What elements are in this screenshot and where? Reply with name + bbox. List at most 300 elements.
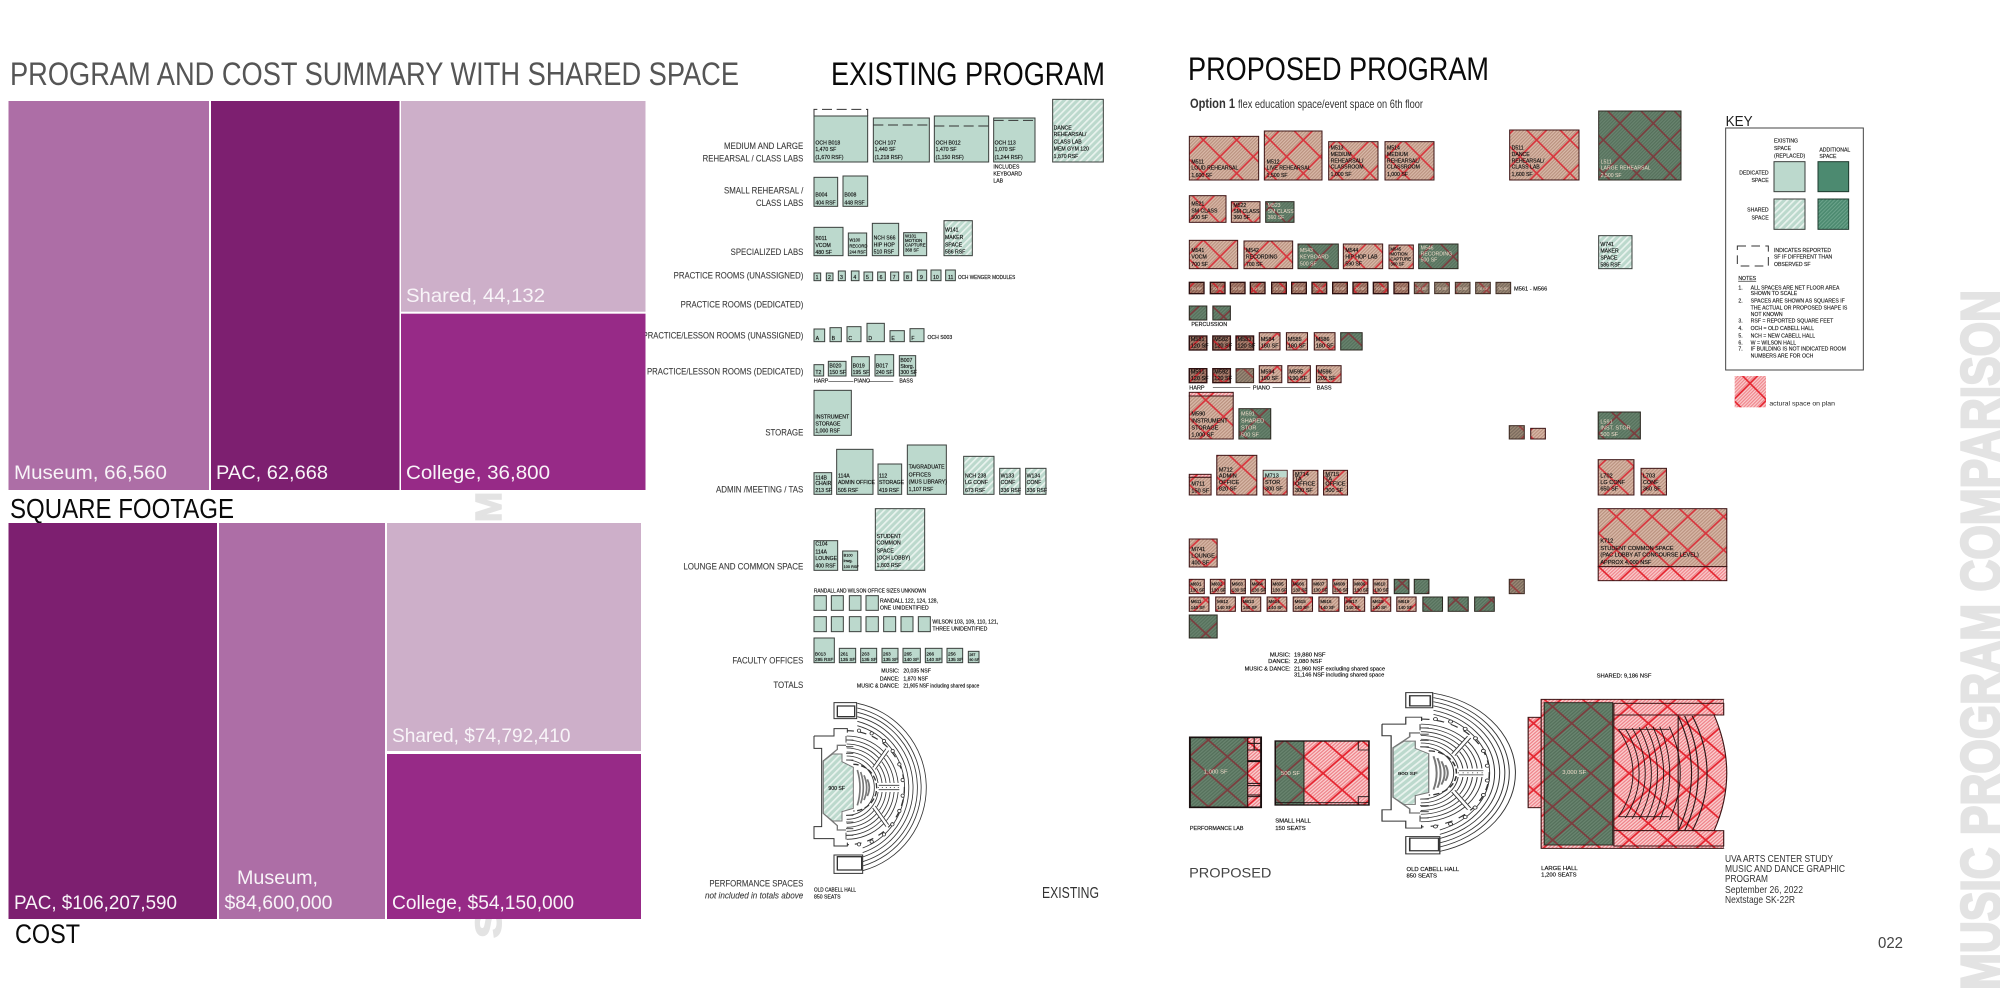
lesson rooms proposed row 2: 190 SF [1289,376,1308,382]
lesson rooms proposed row 1 [1189,333,1362,350]
proposed totals: MUSIC: [1270,653,1291,659]
faculty offices: 140 SF [926,657,941,662]
faculty offices proposed row 2: 140 SF [1346,605,1361,610]
faculty offices proposed row 1: M602 [1211,581,1223,586]
small class rooms proposed: M523 [1268,203,1281,209]
row labels lower: FACULTY OFFICES [732,655,803,665]
faculty offices proposed row 2: 140 SF [1398,605,1413,610]
medium and large rehearsal rooms: 1,070 SF [995,147,1016,153]
storage proposed: STOR [1241,425,1256,431]
key notes: NCH = NEW CABELL HALL [1751,333,1815,339]
specialized labs proposed: 586 RSF [1600,262,1621,268]
panel: treemap cost [8,523,641,919]
practice modules M561 to M566: 70 SF [1478,286,1489,291]
lesson rooms proposed row 2: 120 SF [1191,376,1209,382]
specialized labs proposed: MAKER [1600,248,1619,254]
rehearsal rooms proposed: LARGE REHEARSAL [1601,166,1651,172]
admin rooms: 505 RSF [838,488,858,494]
proposed totals: 2,080 NSF [1294,659,1323,665]
faculty offices proposed row 2: 140 SF [1320,605,1335,610]
admin proposed: L703 [1643,474,1655,480]
existing theater: Old Cabell Hall [705,703,926,901]
unknown size offices: RANDALL AND WILSON OFFICE SIZES UNKNOWN [814,588,926,594]
treemap labels sf: PAC, 62,668 [216,462,328,484]
row labels lower: ADMIN /MEETING / TAS [716,485,803,495]
student common space: STUDENT COMMON SPACE [1600,546,1674,552]
faculty offices proposed row 2: M613 [1243,599,1255,604]
faculty offices proposed row 1: M603 [1232,581,1244,586]
specialized labs proposed: 360 SF [1390,262,1405,267]
key notes: NUMBERS ARE FOR OCH [1751,354,1814,360]
specialized labs proposed: W741 [1600,242,1614,248]
small class rooms proposed: 360 SF [1233,215,1250,221]
faculty offices: 263 [862,651,869,656]
faculty offices: 263 [883,651,891,656]
student common space: K712 [1600,538,1613,544]
medium and large rehearsal rooms: (1,244 RSF) [995,155,1023,161]
lesson rooms dedicated: PIANO [854,379,870,385]
lesson rooms proposed row 2: 202 SF [1318,376,1336,382]
lesson rooms proposed row 1: M585 [1288,337,1302,343]
rehearsal rooms proposed: 1,600 SF [1191,173,1212,179]
row labels lower: LOUNGE AND COMMON SPACE [683,562,803,572]
existing rooms lower block [647,355,1047,690]
specialized labs proposed: 700 SF [1191,262,1208,268]
key column head additional: ADDITIONAL [1819,147,1850,153]
rehearsal rooms proposed: REHEARSAL/ [1512,158,1545,164]
medium and large rehearsal rooms: LAB [993,179,1004,185]
lesson rooms dedicated: B007 [900,358,912,364]
admin rooms: 419 RSF [879,488,899,494]
admin rooms: 673 RSF [965,488,985,494]
practice modules M561 to M566: 70 SF [1375,286,1387,291]
practice modules M561 to M566: 70 SF [1355,286,1366,291]
student common space: APPROX 4,000 NSF [1600,560,1652,566]
admin proposed: OFFICE [1295,481,1316,487]
admin proposed: LG CONF [1600,480,1626,486]
small hall: 150 SEATS [1275,826,1306,832]
performance spaces label [705,878,803,901]
practice modules M561 to M566 [1189,282,1547,294]
storage proposed: SHARED [1241,418,1264,424]
small rehearsal rooms: 404 RSF [815,200,836,206]
performance spaces label: PERFORMANCE SPACES [709,878,803,888]
key notes: 4. [1738,326,1743,332]
lesson rooms proposed row 2: HARP [1189,385,1205,391]
practice modules M561 to M566: 70 SF [1314,286,1325,291]
lounge and common rooms: LOUNGE [815,556,838,562]
faculty offices proposed row 2: M615 [1295,599,1306,604]
faculty offices proposed row 2 [1189,597,1494,638]
rehearsal rooms proposed: M512 [1267,159,1280,165]
medium and large rehearsal rooms: (1,150 RSF) [936,155,964,161]
storage proposed: M591 [1241,412,1255,418]
storage proposed: L591 [1600,419,1613,425]
specialized labs proposed: M544 [1345,248,1358,254]
faculty offices: 135 SF [948,657,963,662]
lesson rooms dedicated: HARP [814,379,829,385]
key row heads: SHARED [1747,207,1769,213]
faculty offices [814,638,980,663]
small rehearsal rooms: 448 RSF [844,200,865,206]
faculty offices proposed row 1: M606 [1293,581,1305,586]
label proposed: PROPOSED [1189,866,1271,881]
practice rooms unassigned: 9 [920,275,923,281]
admin proposed: OFFICE [1219,480,1240,486]
faculty offices proposed row 2: 140 SF [1269,605,1283,610]
practice rooms unassigned: 3 [840,275,843,281]
proposed theater caption: OLD CABELL HALL [1406,867,1459,873]
practice rooms unassigned: 11 [948,275,953,281]
key notes: 6. [1738,340,1743,346]
rehearsal rooms proposed: MEDIUM [1331,152,1352,158]
admin proposed [1189,455,1666,495]
key row heads [1739,171,1769,221]
rehearsal rooms proposed: L511 [1601,159,1612,165]
unknown size offices: WILSON 103, 109, 110, 121, [932,620,998,626]
rehearsal rooms proposed: 1,000 SF [1331,172,1352,178]
storage proposed: 1,000 SF [1191,432,1215,438]
slice: shared sf [401,101,646,312]
lounge and common rooms: SPACE [877,548,894,554]
faculty offices proposed row 1: 130 SF [1354,587,1369,592]
admin proposed: 300 SF [1325,488,1344,494]
theater caption: OLD CABELL HALL [814,888,856,894]
faculty offices proposed row 2: 140 SF [1191,605,1205,610]
lesson rooms proposed row 2: 120 SF [1214,376,1233,382]
faculty offices: 135 SF [862,657,877,662]
proposed totals: DANCE: [1268,659,1291,665]
small class rooms proposed: SM CLASS [1233,209,1260,215]
unknown size offices [814,588,998,632]
storage room: INSTRUMENT [815,414,849,420]
admin rooms: CHAIR [815,481,832,487]
practice modules M561 to M566: 70 SF [1396,286,1407,291]
student common space [1598,509,1727,581]
practice rooms unassigned: 6 [880,275,883,281]
proposed theater caption: 850 SEATS [1406,874,1437,879]
small class rooms proposed: SM CLASS [1191,208,1218,214]
specialized labs: MAKER [945,235,964,241]
percussion rooms [1189,306,1230,328]
practice modules M561 to M566: 70 SF [1232,286,1244,291]
admin proposed: 150 SF [1191,488,1210,494]
proposed performance spaces [1189,653,1736,881]
small rehearsal rooms [814,176,868,206]
rehearsal rooms proposed [1189,111,1681,180]
faculty offices proposed row 2: 140 SF [1372,605,1387,610]
lesson rooms unassigned: E [891,336,895,342]
specialized labs: MOTION [905,238,922,243]
row labels upper: PRACTICE ROOMS (DEDICATED) [681,300,803,310]
admin proposed: M711 [1191,482,1205,488]
specialized labs: RECORD [849,243,867,248]
panel: key [1726,114,1863,407]
admin rooms: OFFICES [909,472,932,478]
practice rooms unassigned: 7 [893,275,896,281]
row labels lower: PRACTICE/LESSON ROOMS (DEDICATED) [647,366,803,376]
specialized labs proposed: KEYBOARD [1300,255,1329,261]
lesson rooms proposed row 1: M583 [1237,337,1251,343]
specialized labs: CAPTURE [905,243,926,248]
admin rooms: LG CONF [965,480,988,486]
performance spaces label: not included in totals above [705,891,803,901]
specialized labs proposed: RECORDING [1246,255,1278,261]
lesson rooms dedicated: T2 [815,370,821,376]
medium and large rehearsal rooms: OCH B012 [936,140,961,146]
admin proposed: M714 [1295,472,1309,478]
faculty offices proposed row 2: M616 [1320,599,1332,604]
lounge proposed: M741 [1191,547,1205,553]
specialized labs proposed: CAPTURE [1390,257,1411,262]
key heading: KEY [1726,114,1753,130]
admin proposed: ADMIN [1219,474,1237,480]
medium and large rehearsal rooms: 1,470 SF [815,147,836,153]
option subtitle [1190,95,1423,111]
admin rooms: W133 [1001,473,1014,479]
row labels upper: PRACTICE ROOMS (UNASSIGNED) [674,270,803,280]
faculty offices proposed row 2: 140 SF [1295,605,1309,610]
faculty offices proposed row 2: 140 SF [1217,605,1232,610]
rehearsal rooms proposed: M514 [1387,146,1400,152]
admin proposed: STOR [1265,480,1280,486]
faculty offices: 266 [926,651,934,656]
admin proposed: M712 [1219,467,1233,473]
lesson rooms unassigned: C [848,336,852,342]
practice rooms unassigned: 5 [866,275,869,281]
lesson rooms unassigned: A [816,336,820,342]
admin proposed: TA [1295,477,1302,483]
option subtitle: flex education space/event space on 6th floor [1238,97,1423,111]
lesson rooms unassigned [814,323,952,342]
key red swatch [1735,376,1835,407]
medium and large rehearsal rooms: CLASS LAB [1054,139,1082,145]
lounge and common rooms: 114A [815,549,828,555]
theater caption [814,888,856,900]
specialized labs proposed: M542 [1246,248,1259,254]
lesson rooms dedicated: BASS [899,379,914,385]
lesson rooms proposed row 1: 180 SF [1261,343,1279,349]
rehearsal rooms proposed: CLASSROOM [1387,165,1420,171]
treemap labels cost: PAC, $106,207,590 [14,892,177,914]
specialized labs: 244 RSF [849,249,866,254]
faculty offices: 135 SF [840,657,855,662]
admin rooms: CONF [1001,480,1015,486]
specialized labs proposed: HIP HOP LAB [1345,255,1378,261]
admin rooms: 112 [879,473,887,479]
faculty offices proposed row 1: M605 [1272,581,1284,586]
watermark fragments behind treemaps: M [468,492,509,522]
specialized labs proposed: 700 SF [1246,262,1263,268]
performance lab: PERFORMANCE LAB [1190,826,1244,832]
storage proposed: 500 SF [1241,432,1260,438]
key notes: RSF = REPORTED SQUARE FEET [1751,319,1834,325]
practice modules M561 to M566: M561 - M566 [1514,287,1547,293]
specialized labs: W100 [849,237,860,242]
faculty offices proposed row 1: 130 SF [1293,587,1308,592]
row labels upper: CLASS LABS [756,198,803,208]
lounge and common rooms: 1,803 RSF [877,563,901,569]
lesson rooms proposed row 1: M582 [1214,337,1228,343]
key row heads: DEDICATED [1739,171,1769,177]
faculty offices proposed row 1: 130 SF [1334,587,1349,592]
lounge and common rooms: C104 [815,541,828,547]
rehearsal rooms proposed: 1,000 SF [1387,172,1408,178]
medium and large rehearsal rooms: INCLUDES [993,165,1019,171]
medium and large rehearsal rooms: 1,870 RSF [1054,154,1078,160]
admin proposed: 300 SF [1265,487,1284,493]
watermark fragments behind treemaps: S [468,908,509,938]
existing totals: MUSIC: [881,669,899,675]
lesson rooms unassigned: F [911,336,914,342]
existing totals [857,669,979,690]
rehearsal rooms proposed: 1,600 SF [1512,172,1533,178]
small rehearsal rooms: B008 [844,193,856,199]
lesson rooms proposed row 1: 180 SF [1288,343,1306,349]
key row heads: SPACE [1752,178,1769,184]
percussion rooms: PERCUSSION [1191,322,1227,328]
proposed totals: 31,146 NSF including shared space [1294,673,1384,679]
practice rooms unassigned: OCH WENGER MODULES [958,275,1016,281]
small class rooms proposed: 360 SF [1268,215,1284,221]
rehearsal rooms proposed: 1,500 SF [1267,173,1288,179]
option subtitle: Option 1 [1190,95,1235,111]
lesson rooms dedicated: 240 SF [876,370,893,376]
key notes: 7. [1738,347,1743,353]
admin proposed: 820 SF [1219,487,1238,493]
lesson rooms unassigned: OCH S003 [927,335,952,341]
slice: college sf [401,314,646,490]
storage proposed: M590 [1191,412,1205,418]
admin rooms: 114B [815,475,827,481]
lounge proposed [1189,539,1217,567]
small class rooms proposed: M522 [1233,203,1246,209]
lesson rooms dedicated: B017 [876,363,888,369]
key column heads: SPACE [1774,146,1792,152]
medium and large rehearsal rooms: REHEARSAL/ [1054,132,1087,138]
specialized labs: NCH S66 [874,235,895,241]
medium and large rehearsal rooms: (1,670 RSF) [815,155,844,161]
rehearsal rooms proposed: LOUD REHEARSAL [1191,166,1238,172]
small hall: 500 SF [1281,771,1301,777]
key column head additional: SPACE [1819,154,1837,160]
practice modules M561 to M566: 70 SF [1335,286,1346,291]
admin rooms: TA/GRADUATE [909,465,945,471]
row labels lower: STORAGE [765,428,803,438]
lesson rooms proposed row 2: M592 [1214,370,1228,376]
admin proposed: L702 [1600,474,1613,480]
rehearsal rooms proposed: M513 [1331,146,1344,152]
lounge and common rooms: (OCH LOBBY) [877,555,910,561]
key notes: NOTES [1738,276,1757,282]
lesson rooms unassigned: D [868,336,872,342]
footer study info: Nextstage SK-22R [1725,894,1795,906]
faculty offices: B013 [815,651,826,656]
practice modules M561 to M566: 70 SF [1212,286,1224,291]
faculty offices proposed row 2: 140 SF [1243,605,1258,610]
specialized labs proposed: M545 [1390,247,1401,252]
key notes: ALL SPACES ARE NET FLOOR AREA [1751,285,1840,291]
medium and large rehearsal rooms [814,99,1103,185]
specialized labs: 480 SF [815,250,832,256]
faculty offices: 140 SF [904,657,919,662]
specialized labs proposed: MOTION [1390,252,1408,257]
rehearsal rooms proposed: CLASS LAB [1512,165,1540,171]
unknown size offices: THREE UNIDENTIFIED [932,626,988,632]
admin rooms: 336 RSF [1001,488,1021,494]
key notes: 5. [1738,333,1743,339]
watermark fragments behind treemaps [468,492,509,938]
heading: cost: COST [15,919,80,949]
lounge and common rooms: STUDENT [877,534,901,540]
specialized labs [814,221,972,256]
small class rooms proposed: M521 [1191,202,1204,208]
key notes: 1. [1738,285,1743,291]
rehearsal rooms proposed: LIVE REHEARSAL [1267,166,1311,172]
key column heads: EXISTING [1774,139,1798,145]
faculty offices: 265 [904,651,912,656]
heading: existing program: EXISTING PROGRAM [831,56,1105,92]
row labels upper: REHEARSAL / CLASS LABS [703,153,803,163]
storage room [814,390,851,435]
lesson rooms dedicated: 195 SF [853,370,869,376]
key dashed symbol: SF IF DIFFERENT THAN [1774,255,1833,261]
large hall: 3,000 SF [1562,770,1587,776]
practice rooms unassigned: 4 [853,275,856,281]
medium and large rehearsal rooms: DANCE [1054,125,1072,131]
specialized labs proposed [1189,236,1632,269]
specialized labs proposed: 500 SF [1300,261,1317,267]
small hall: SMALL HALL [1275,819,1311,824]
lounge and common rooms: lnwg. [844,559,853,563]
lounge and common rooms [814,509,925,570]
existing totals: 1,870 NSF [903,677,928,683]
admin proposed: M715 [1325,472,1339,478]
panel: treemap square footage [8,101,646,490]
medium and large rehearsal rooms: KEYBOARD [993,171,1022,177]
proposed totals: 21,960 NSF excluding shared space [1294,667,1385,672]
faculty offices proposed row 1: M608 [1334,581,1346,586]
key notes: THE ACTUAL OR PROPOSED SHAPE IS [1751,305,1848,311]
lesson rooms dedicated: 300 SF [900,370,917,376]
practice rooms unassigned [814,270,1016,281]
specialized labs: VCOM [815,243,831,249]
key notes: IF BUILDING IS NOT INDICATED ROOM [1751,347,1846,353]
key notes: W = WILSON HALL [1751,340,1796,346]
rehearsal rooms proposed: REHEARSAL/ [1387,158,1420,164]
specialized labs: 368 SF [905,247,919,252]
medium and large rehearsal rooms: OCH B018 [815,140,840,146]
slice: PAC sf [211,101,400,490]
treemap labels cost: Shared, $74,792,410 [392,725,571,747]
admin rooms: W134 [1027,473,1040,479]
storage proposed: 500 SF [1600,432,1619,438]
main title: PROGRAM AND COST SUMMARY WITH SHARED SPACE [10,56,739,92]
lesson rooms proposed row 1: M586 [1316,337,1330,343]
specialized labs: W101 [905,233,916,238]
proposed theater: Old Cabell Hall [1382,693,1515,854]
practice rooms unassigned: 1 [816,275,819,281]
admin proposed: TA [1325,477,1332,483]
lesson rooms proposed row 1: M584 [1261,337,1275,343]
treemap labels sf: College, 36,800 [406,462,550,484]
shared total: SHARED: 9,186 NSF [1597,674,1652,680]
lesson rooms proposed row 2: PIANO [1253,385,1270,391]
faculty offices proposed row 1: M609 [1354,581,1366,586]
treemap labels sf [14,285,550,484]
specialized labs proposed: VOCM [1191,255,1207,261]
practice modules M561 to M566: 70 SF [1498,286,1509,291]
